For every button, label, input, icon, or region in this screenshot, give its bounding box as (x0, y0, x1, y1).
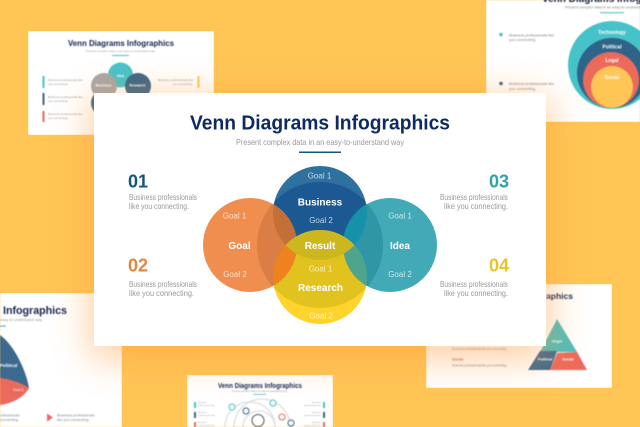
slide: bottom-left thumbnail: like you connecting. (57, 418, 89, 422)
text block 03 (440, 172, 509, 211)
slide: bottom-center thumbnail: professionals like (304, 414, 322, 417)
text block 02: Business professionals (129, 279, 197, 289)
slide: bottom-right thumbnail (426, 284, 612, 388)
slide: top-left thumbnail: you connecting. (173, 82, 193, 86)
venn labels: Idea (390, 241, 410, 252)
venn labels: Goal 1 (388, 212, 412, 220)
slide: bottom-center thumbnail: professionals like (198, 424, 216, 427)
venn labels: Result (305, 241, 336, 252)
slide: top-right thumbnail: you connecting. (509, 37, 536, 42)
slide: top-left thumbnail: Venn Diagrams Infographics (68, 38, 174, 48)
slide: bottom-center thumbnail: professionals like (304, 424, 322, 427)
venn labels: Goal 2 (388, 270, 412, 279)
slide: top-left thumbnail (28, 31, 214, 135)
slide: top-left thumbnail: Business (96, 84, 111, 88)
slide: top-left thumbnail: Business professionals like (158, 78, 193, 82)
slide: bottom-center thumbnail: professionals like (198, 404, 216, 407)
venn labels: Goal 2 (309, 216, 333, 225)
slide: bottom-center thumbnail: Venn Diagrams Infographics (218, 383, 302, 390)
slide: bottom-center thumbnail: Business (312, 412, 322, 414)
text block 01: 01 (128, 172, 148, 192)
venn labels: Business (298, 198, 343, 208)
text block 04: like you connecting. (444, 288, 508, 298)
slide: top-left thumbnail: Idea (117, 74, 125, 78)
slide: top-left thumbnail: you connecting. (48, 82, 68, 86)
slide: top-left thumbnail: you connecting. (48, 116, 68, 120)
slide: bottom-left thumbnail: Political (0, 363, 17, 368)
text block 03: 03 (489, 172, 509, 192)
overlaps (274, 182, 366, 236)
slide: top-right thumbnail: Political (602, 44, 622, 50)
title: Venn Diagrams Infographics (190, 112, 450, 134)
slide: bottom-center thumbnail: Business (312, 422, 322, 424)
slide: bottom-right thumbnail: Business professionals like you connecting. (452, 364, 507, 368)
slide: bottom-left thumbnail: Infographics (3, 305, 67, 317)
slide: bottom-right thumbnail: Virgin (552, 340, 563, 344)
slide: bottom-right thumbnail: Venn Diagrams Infographics (458, 291, 573, 301)
text block 04: Business professionals (440, 279, 508, 289)
slide: bottom-right thumbnail: Business professionals like you connecting. (452, 347, 507, 351)
slide: top-right thumbnail: Business professionals like (509, 32, 554, 38)
slide: bottom-left thumbnail: connecting. (0, 418, 19, 422)
venn labels: Goal (228, 241, 251, 252)
venn labels: Goal 2 (223, 270, 247, 279)
slide: bottom-center thumbnail: professionals like (198, 414, 216, 417)
slide: bottom-left thumbnail (0, 293, 122, 427)
venn labels: Goal 2 (309, 312, 333, 320)
text block 01 (128, 172, 197, 211)
slide: top-right thumbnail: Social (605, 75, 620, 81)
slide: bottom-center thumbnail (187, 375, 333, 427)
subtitle: Present complex data in an easy-to-understand way (236, 137, 405, 147)
text block 01: Business professionals (129, 192, 197, 202)
venn labels: Goal 1 (223, 212, 247, 220)
text block 03: like you connecting. (444, 201, 508, 211)
venn diagram (203, 166, 437, 324)
slide: bottom-center thumbnail: Business (198, 412, 208, 414)
slide: bottom-left thumbnail: easy-to-understand way (0, 318, 42, 322)
slide: bottom-center thumbnail: Present complex data in an easy-to-understand way (232, 390, 288, 393)
slide: top-right thumbnail (486, 0, 640, 122)
slide: bottom-center thumbnail: Business (312, 402, 322, 404)
slide: top-right thumbnail: Business professionals like (509, 81, 554, 86)
panel: main slide (94, 93, 546, 346)
text block 03: Business professionals (440, 192, 508, 202)
slide: bottom-right thumbnail: Social (452, 358, 463, 362)
slide: bottom-left thumbnail: rofessionals (0, 414, 20, 418)
slide: bottom-center thumbnail: Business (198, 422, 208, 424)
slide: bottom-right thumbnail: Social (562, 358, 574, 362)
slide: top-right thumbnail: Technology (598, 30, 626, 36)
slide: bottom-center thumbnail: professionals like (304, 404, 322, 407)
slide: bottom-right thumbnail: Political (538, 358, 552, 362)
slide: bottom-left thumbnail: Business professionals (57, 414, 95, 418)
text block 04 (440, 256, 509, 298)
slide: bottom-center thumbnail: Business (198, 402, 208, 404)
venn labels: Goal 1 (309, 264, 333, 274)
text block 01: like you connecting. (129, 201, 189, 211)
slide: top-left thumbnail: Business professionals like (48, 95, 83, 99)
slide: top-left thumbnail: Business professionals like (48, 78, 83, 82)
venn labels: Goal 1 (308, 172, 332, 180)
text block 04: 04 (489, 256, 509, 276)
slide: top-left thumbnail: Research (129, 84, 146, 88)
slide: top-left thumbnail: Business professionals like (48, 112, 83, 116)
text block 02 (128, 256, 197, 298)
slide: top-left thumbnail: Present complex data in an easy-to-understand way (86, 49, 156, 53)
slide: top-right thumbnail: Legal (605, 58, 619, 64)
venn labels (223, 172, 412, 320)
slide: bottom-left thumbnail: Goal 3 (13, 388, 23, 392)
text block 02: like you connecting. (129, 288, 194, 298)
title underline (299, 152, 341, 153)
main card shadow (90, 97, 550, 359)
text block 02: 02 (128, 256, 148, 276)
slide: top-right thumbnail: you connecting. (509, 86, 536, 91)
venn labels: Research (298, 283, 343, 294)
slide: top-left thumbnail: you connecting. (48, 99, 68, 103)
